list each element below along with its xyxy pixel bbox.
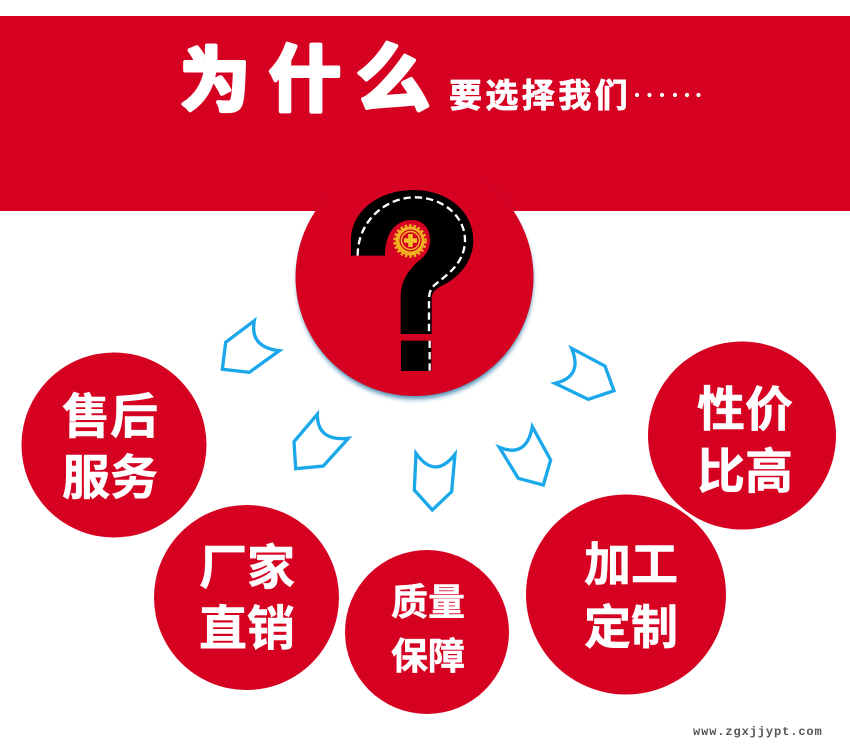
circle: 厂家直销: 厂家 xyxy=(199,542,295,595)
circle: 质量保障: 质量 xyxy=(391,582,465,623)
arrow: to value xyxy=(555,348,614,399)
title: 为什么: 什 xyxy=(269,41,341,121)
circle: 售后服务 xyxy=(22,352,206,538)
arrows xyxy=(222,321,614,510)
arrow: to quality xyxy=(414,453,455,510)
title: 为什么: 为 xyxy=(180,42,250,120)
circle: 售后服务: 服务 xyxy=(62,452,158,505)
icon: gear and wheat emblem xyxy=(394,226,426,256)
circle: 售后服务: 售后 xyxy=(62,391,158,444)
icon: road question mark xyxy=(351,190,473,371)
circle: 加工定制 xyxy=(526,494,726,694)
arrow: to custom processing xyxy=(499,427,551,485)
circle: 厂家直销: 直销 xyxy=(199,603,295,656)
circle: 质量保障: 保障 xyxy=(391,636,465,677)
subtitle dots xyxy=(635,93,701,97)
main question circle xyxy=(296,158,534,399)
website watermark: www.zgxjjypt.com xyxy=(693,725,823,739)
arrow: to after-sales xyxy=(222,321,279,372)
arrow: to factory direct xyxy=(294,414,348,469)
subtitle: 要选择我们: 要选择我们 xyxy=(449,77,631,114)
title: 为什么 xyxy=(180,38,430,121)
circle: 性价比高 xyxy=(648,342,836,530)
circle: 性价比高: 比高 xyxy=(697,446,793,499)
header band xyxy=(0,16,850,211)
circle: 质量保障 xyxy=(345,550,509,714)
circle: 性价比高: 性价 xyxy=(697,384,793,437)
title: 为什么: 么 xyxy=(356,38,430,121)
circle: 加工定制: 定制 xyxy=(584,601,678,654)
circle: 厂家直销 xyxy=(154,505,339,690)
circle: 加工定制: 加工 xyxy=(584,538,678,591)
